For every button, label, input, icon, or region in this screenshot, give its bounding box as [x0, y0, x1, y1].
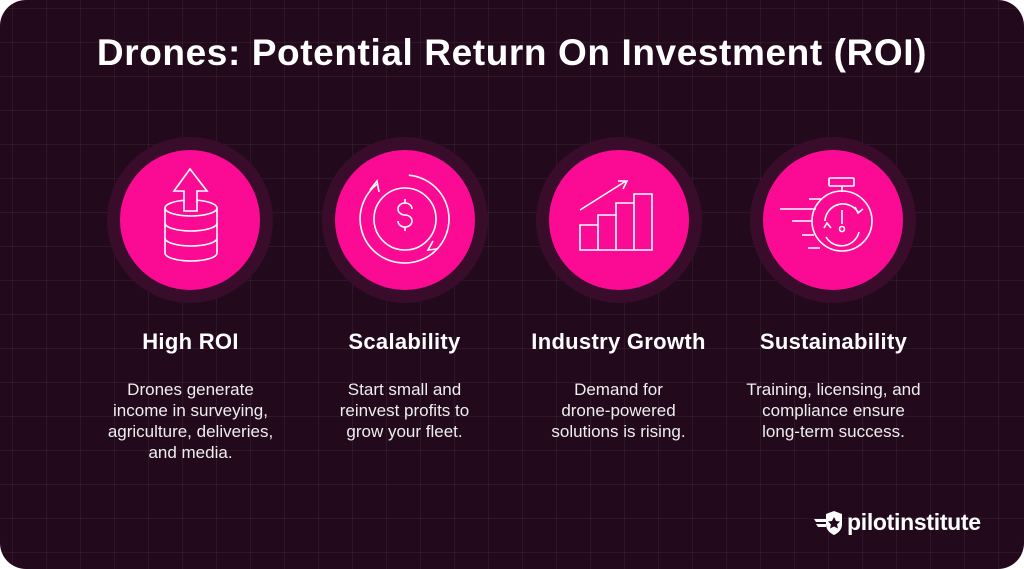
text: High ROI	[142, 329, 239, 354]
icon: stacked coins with up arrow	[107, 137, 273, 303]
text: grow your fleet.	[346, 422, 463, 441]
icon: bar chart growth	[536, 137, 702, 303]
text: long-term success.	[762, 422, 905, 441]
text: Training, licensing, and	[746, 380, 921, 399]
text: Industry Growth	[531, 329, 706, 354]
column: High ROI	[108, 329, 273, 462]
title: Drones: Potential Return On Investment (ROI)	[97, 32, 927, 73]
text: Drones generate	[127, 380, 254, 399]
text: Scalability	[348, 329, 461, 354]
logo: pilotinstitute	[847, 509, 981, 535]
icon: dollar cycle	[322, 137, 488, 303]
text: drone-powered	[561, 401, 676, 420]
column: Industry Growth	[531, 329, 706, 441]
text: and media.	[148, 443, 233, 462]
text: income in surveying,	[113, 401, 268, 420]
icon: stopwatch	[750, 137, 916, 303]
column: Sustainability	[746, 329, 921, 441]
column: Scalability	[340, 329, 469, 441]
text: compliance ensure	[762, 401, 905, 420]
text: Demand for	[574, 380, 663, 399]
text: agriculture, deliveries,	[108, 422, 273, 441]
text: Sustainability	[760, 329, 907, 354]
text: solutions is rising.	[551, 422, 686, 441]
text: Start small and	[348, 380, 461, 399]
text: reinvest profits to	[340, 401, 469, 420]
